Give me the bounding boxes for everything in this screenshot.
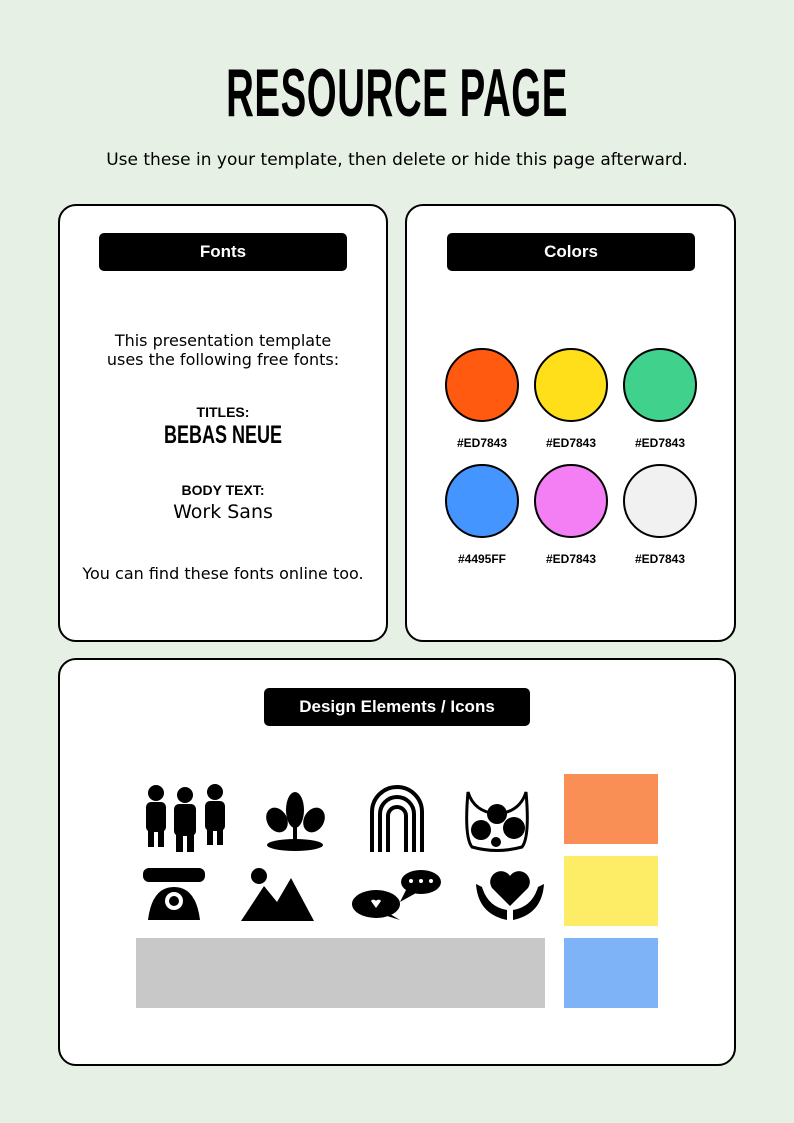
icon: speech bubbles xyxy=(352,870,441,920)
icon: telephone xyxy=(143,868,205,920)
icon: flower xyxy=(262,792,329,851)
swatches: #ED7843 xyxy=(635,436,685,450)
body font xyxy=(173,482,273,523)
swatches: #4495FF xyxy=(458,552,506,566)
design heading xyxy=(264,688,530,726)
fonts intro text: This presentation template xyxy=(115,331,331,350)
panel: colors xyxy=(405,204,736,642)
body font: BODY TEXT: xyxy=(182,482,264,498)
texture swatches xyxy=(564,774,658,844)
icon: mountains xyxy=(241,868,314,921)
swatches: #ED7843 xyxy=(457,436,507,450)
fonts heading xyxy=(99,233,347,271)
title: RESOURCE PAGE xyxy=(226,55,568,131)
subtitle: Use these in your template, then delete or hide this page afterward. xyxy=(106,150,688,170)
fonts heading: Fonts xyxy=(200,242,246,261)
swatches: #ED7843 xyxy=(635,552,685,566)
icon: fruit bag xyxy=(467,792,527,850)
fonts intro text xyxy=(107,331,339,369)
panel: design elements xyxy=(58,658,736,1066)
titles font: TITLES: xyxy=(197,404,249,420)
grey bar xyxy=(136,938,545,1008)
swatches: #ED7843 xyxy=(546,436,596,450)
titles font: BEBAS NEUE xyxy=(164,421,282,449)
colors heading: Colors xyxy=(544,242,598,261)
swatches: #ED7843 xyxy=(546,552,596,566)
titles font xyxy=(164,404,282,449)
note: You can find these fonts online too. xyxy=(82,564,364,583)
design heading: Design Elements / Icons xyxy=(299,697,495,716)
icons xyxy=(143,784,544,921)
icon: rainbow xyxy=(372,787,422,852)
body font: Work Sans xyxy=(173,501,273,523)
swatches xyxy=(445,348,697,566)
icon: hands heart xyxy=(476,871,544,920)
fonts intro text: uses the following free fonts: xyxy=(107,350,339,369)
colors heading xyxy=(447,233,695,271)
icon: people xyxy=(146,784,225,852)
panel: fonts xyxy=(58,204,388,642)
